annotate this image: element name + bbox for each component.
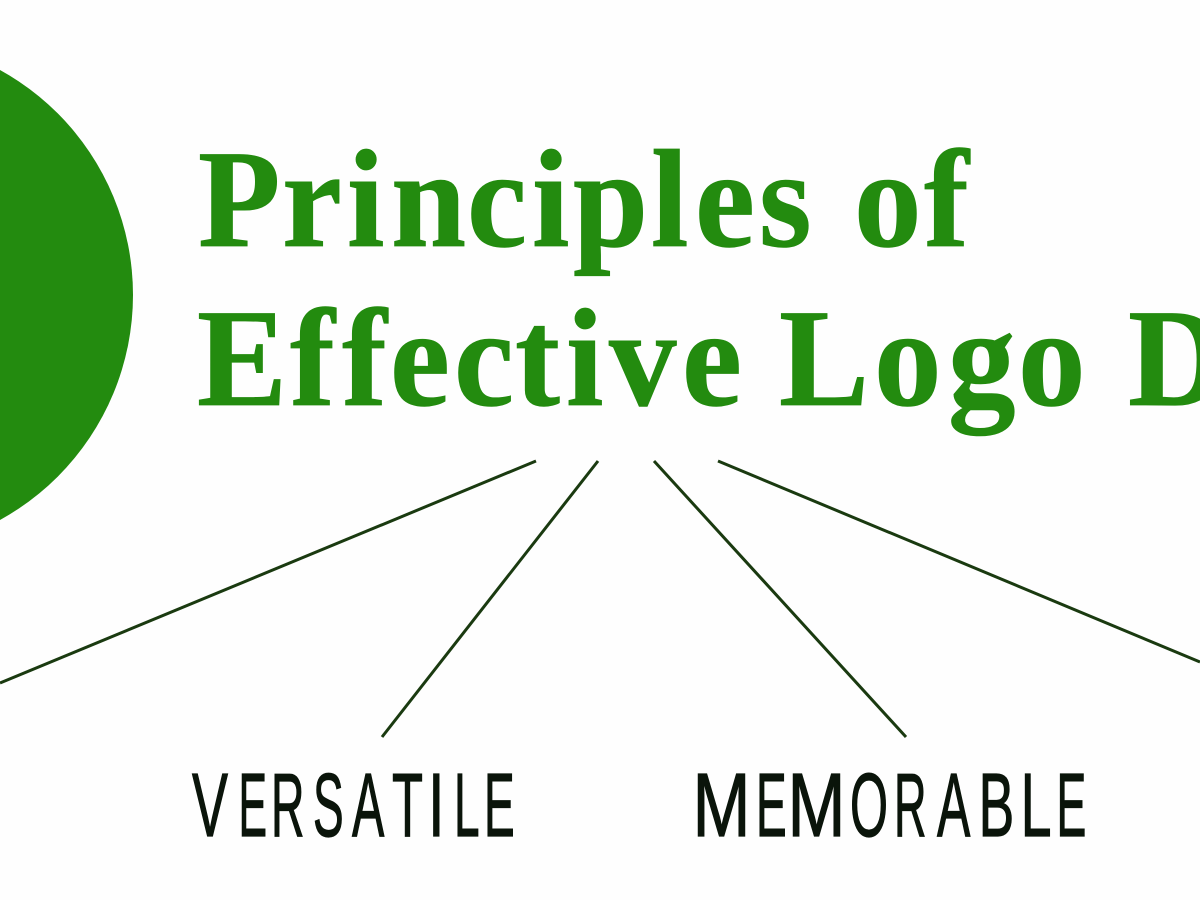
label: memorable: O	[850, 755, 888, 856]
label: versatile: S	[313, 755, 344, 856]
label: memorable: A	[937, 755, 970, 856]
label: memorable: E	[756, 755, 787, 856]
connector lines	[0, 461, 1200, 737]
label: versatile: L	[454, 755, 480, 856]
label: versatile: E	[238, 755, 267, 856]
label: memorable: L	[1021, 755, 1051, 856]
label: memorable: E	[1056, 755, 1086, 856]
label: versatile: I	[428, 755, 445, 856]
label: versatile: E	[484, 755, 515, 856]
label: versatile: R	[271, 755, 304, 856]
line to far left	[0, 461, 536, 683]
title line 1: Principles of	[198, 122, 971, 277]
label: versatile: T	[392, 755, 423, 856]
label: memorable: M	[692, 755, 750, 856]
label: memorable: B	[979, 755, 1014, 856]
line to memorable	[654, 461, 906, 737]
label: memorable: R	[894, 755, 927, 856]
label: versatile: A	[352, 755, 384, 856]
icon: green circle	[0, 38, 133, 552]
label: memorable: M	[788, 755, 845, 856]
label: versatile: V	[192, 755, 228, 856]
title	[197, 122, 1200, 436]
line to versatile	[382, 461, 598, 737]
line to far right	[718, 461, 1200, 662]
